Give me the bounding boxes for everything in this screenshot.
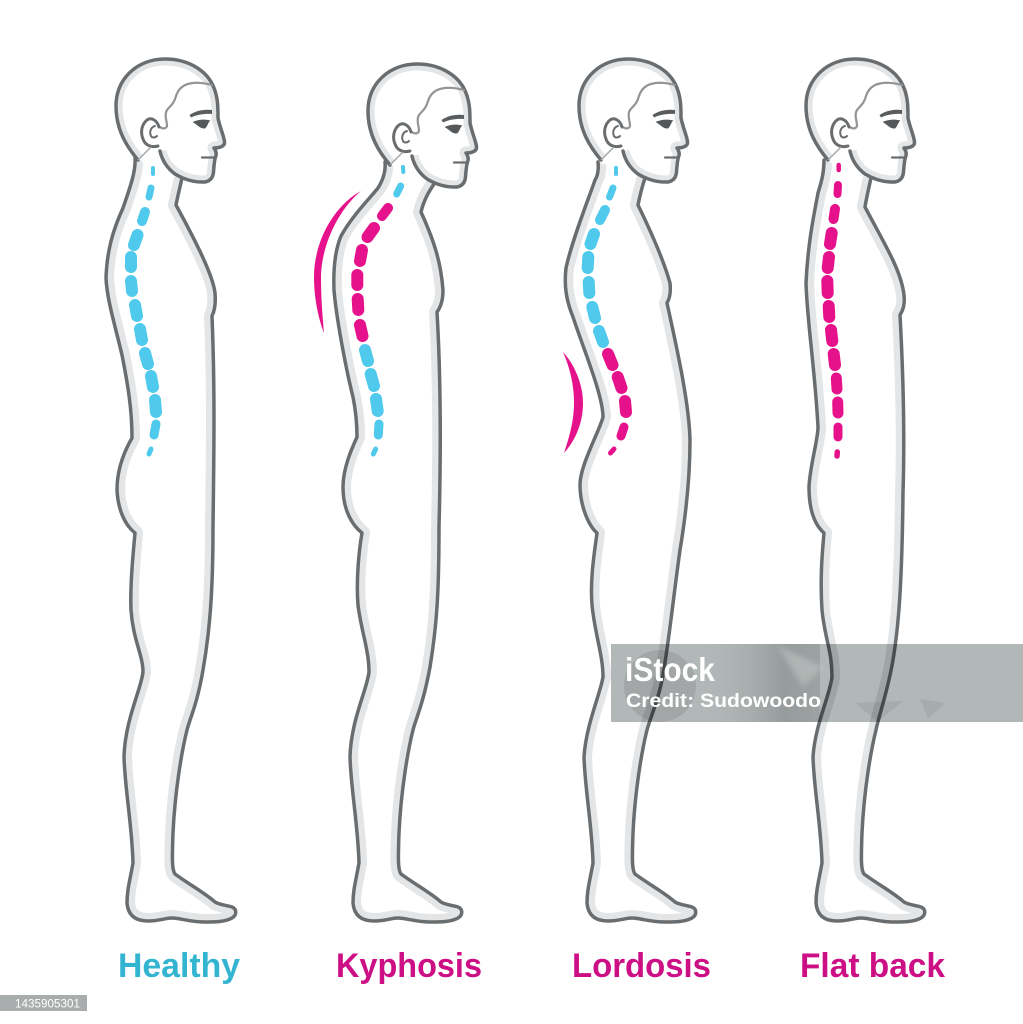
watermark credit text: Credit: Sudowoodo	[626, 691, 821, 712]
label: Kyphosis: Kyphosis	[336, 947, 482, 985]
image id tag	[0, 995, 87, 1011]
watermark logo text: iStock	[625, 651, 716, 688]
label: Healthy: Healthy	[118, 947, 240, 985]
arc: lower back curvature marker	[563, 352, 583, 453]
image id tag: 1435905301	[15, 996, 80, 1010]
spine: lordosis curve	[588, 168, 626, 453]
watermark band	[611, 644, 1023, 722]
arc: upper back curvature marker	[314, 191, 361, 333]
figure: flat back posture	[806, 59, 925, 922]
icon: head, lordosis	[579, 59, 688, 182]
icon: head, flat back	[806, 59, 915, 182]
icon: head, healthy	[116, 59, 225, 182]
spine: flat back line	[827, 165, 839, 456]
figure: healthy posture	[106, 59, 236, 922]
figure: kyphosis posture	[314, 64, 477, 922]
label: Lordosis: Lordosis	[572, 947, 711, 985]
spine: kyphosis curve	[357, 167, 403, 454]
label: Flat back: Flat back	[800, 947, 945, 985]
figure: lordosis posture	[563, 59, 696, 922]
spine: healthy curve	[131, 168, 156, 454]
icon: head, kyphosis	[368, 64, 477, 187]
